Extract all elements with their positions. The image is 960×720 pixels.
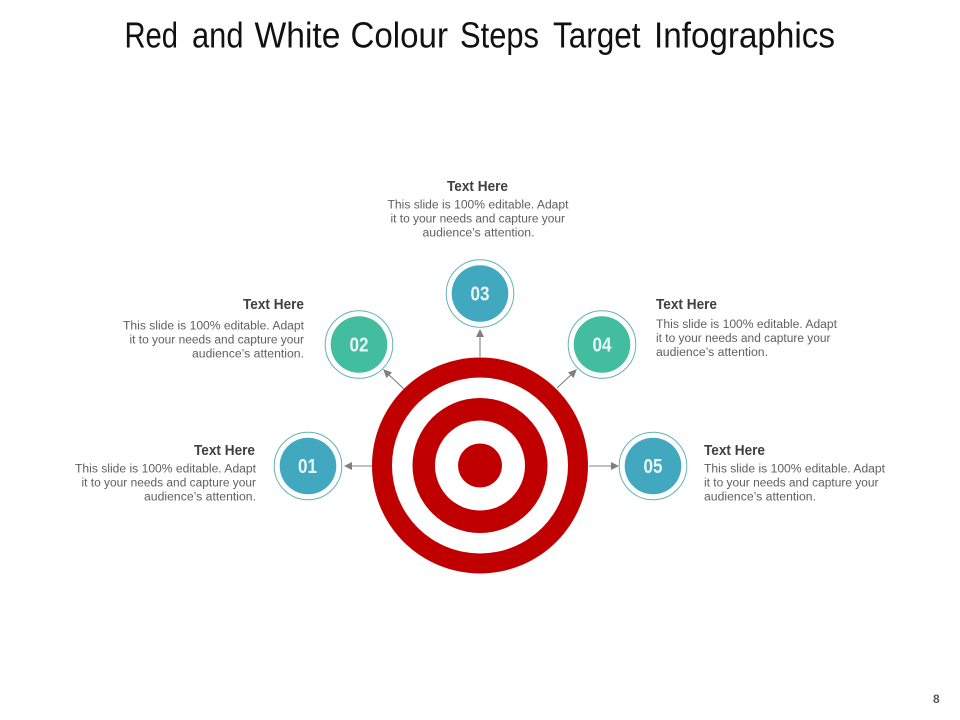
text block 05: Text Here — [704, 443, 765, 459]
arrow: target to step 01 — [344, 462, 372, 470]
text block 05: audience’s attention. — [704, 492, 816, 504]
text block 01: This slide is 100% editable. Adapt — [75, 464, 257, 476]
title: and — [192, 14, 244, 56]
text block 02: Text Here — [243, 297, 304, 313]
text block 02: audience’s attention. — [192, 348, 304, 360]
title: Steps — [460, 14, 539, 56]
text block 02: it to your needs and capture your — [130, 334, 304, 346]
title — [124, 14, 835, 56]
text block 04 — [656, 297, 838, 359]
title: Colour — [350, 14, 448, 56]
title: Infographics — [654, 14, 835, 56]
text block 01: audience’s attention. — [144, 492, 256, 504]
text block 05: This slide is 100% editable. Adapt — [704, 464, 886, 476]
text block 04: audience’s attention. — [656, 347, 768, 359]
arrow: target to step 03 — [476, 329, 484, 357]
text block 01 — [75, 443, 257, 504]
text block 03: audience’s attention. — [422, 228, 534, 240]
text block 02 — [123, 297, 305, 360]
step badge 03 — [446, 260, 514, 327]
step badge 05 — [619, 432, 687, 500]
arrow: target to step 04 — [557, 369, 577, 388]
title: Red — [124, 14, 178, 56]
step badge 01: 01 — [298, 456, 317, 478]
text block 05 — [704, 443, 886, 504]
step badge 03: 03 — [470, 284, 490, 306]
title: White — [254, 14, 340, 56]
text block 02: This slide is 100% editable. Adapt — [123, 320, 305, 332]
text block 03: Text Here — [447, 179, 508, 195]
step badge 04: 04 — [592, 334, 612, 356]
step badge 05: 05 — [644, 456, 662, 478]
text block 05: it to your needs and capture your — [704, 478, 879, 490]
step badge 01 — [274, 432, 342, 500]
text block 04: Text Here — [656, 297, 717, 313]
text block 01: Text Here — [194, 443, 255, 459]
text block 03 — [388, 179, 569, 240]
text block 04: This slide is 100% editable. Adapt — [656, 319, 838, 331]
target graphic — [372, 358, 588, 574]
arrow: target to step 05 — [589, 462, 619, 470]
step badge 04 — [568, 311, 636, 378]
title: Target — [553, 14, 640, 56]
arrow: target to step 02 — [383, 369, 404, 389]
text block 04: it to your needs and capture your — [656, 333, 831, 345]
text block 03: This slide is 100% editable. Adapt — [388, 200, 569, 212]
step badge 02: 02 — [350, 334, 368, 356]
text block 01: it to your needs and capture your — [82, 478, 256, 490]
step badge 02 — [325, 311, 393, 378]
text block 03: it to your needs and capture your — [390, 214, 565, 226]
page number: 8 — [933, 692, 940, 706]
